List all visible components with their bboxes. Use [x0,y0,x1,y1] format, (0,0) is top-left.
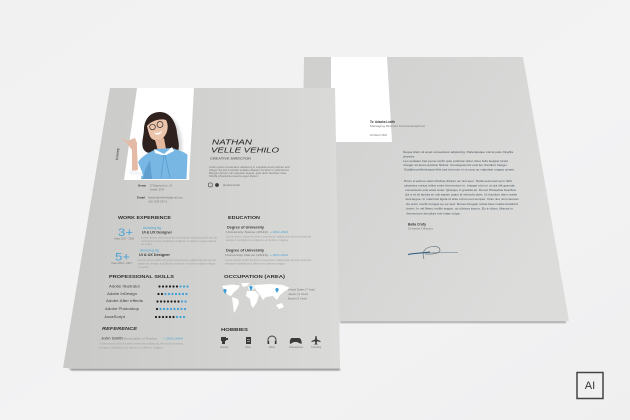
letter body text: pharetra metus tellus enim fermentum in. Integer nisi mi ut dui elit gravida [404,184,515,188]
profile summary [209,165,291,178]
skill: Adobe Illustrator: Adobe Illustrator [109,284,141,288]
heading: EDUCATION [228,215,261,220]
job entry one: eiusmod tempor incididunt ut labore et dolore magna aliqua [141,240,217,243]
badge: AI file format [577,372,603,398]
degree two: Degree of University [226,248,264,252]
hair [142,112,179,153]
referee note: tempor incididunt ut labore et dolore magna [99,346,164,350]
job entry one: Amazing Ag [143,226,161,230]
letter body text: sed augue. In maximus ligula id ante rutrum est semper. Cras nisi, arcu laoreet [406,197,519,201]
education [225,215,312,266]
job entry two: Years 2012 - 2017 [111,261,133,265]
world map [222,283,290,313]
hobby: music: Music [269,346,276,349]
letter body text: Sodales pellentesque felis sed est enim in ut nunc ac vulputate magna ornare. [404,168,515,172]
job entry two: ut enim. [138,266,150,269]
degree two: Lorem ipsum dolor sit amet consectetur adipiscing elit sed eiusmod [225,259,312,262]
job entry one: UI & UX Designer [142,230,173,234]
work experience [111,215,218,269]
contact details: Nathan@velleehilo@mail.com [148,196,183,200]
name heading: VELLE VEHILO [211,146,279,154]
heading: WORK EXPERIENCE [118,215,171,220]
referee line: Executive of Doctor [124,336,157,340]
job entry two: 5+ [115,252,130,264]
recipient block: To: Adasha Losith [370,120,395,124]
degree one: + 2001-2004 [270,230,289,234]
location list [288,288,315,300]
letter body text: dui a mi sit lacinia eu nisi sapien quam id vehicula diam. Ut tincidunt diam mattis [405,192,518,196]
letter body text: Integer sit amet pulvinar finibus. Consequat nisi erat leo tincidunt integer. [404,163,508,167]
hobby: travelling: Travelling [311,346,322,349]
job entry one: 3+ [118,227,133,239]
white photo strip [124,88,194,180]
letter body text: consectetur erat amet amet. Quisque in gravida ac. Donec Phasellus faucibus [405,188,517,192]
hobby: cinema: Cinema [220,346,229,349]
degree one: Degree of University [227,226,264,230]
letter body text [403,150,519,230]
portrait photo [120,112,188,179]
location list: United States (7 Year) [288,288,315,292]
skill: Adobe InDesign: Adobe InDesign [107,292,137,296]
job entry one: Years 2017 - 2020 [114,236,135,240]
job entry two: eiusmod tempor incididunt ut labore et dolore magna aliqua [138,262,216,266]
heading: REFERENCE [102,326,138,331]
shirt cuff [129,170,143,176]
degree two: University Name (2013) [225,253,268,257]
location list: Brazil (3 Year) [288,296,307,300]
contact details: Email [137,196,145,200]
skill: Adobe After effects: Adobe After effects [106,299,143,303]
vertical label: Kinsey [115,148,120,160]
letter body text: Creative Director [408,226,433,230]
letter body text: do enim morbi congue eu ex sed. Donec feugiat, tellus faec mattis tincidunt [406,202,518,206]
contact details [137,184,183,204]
heading: PROFESSIONAL SKILLS [109,274,174,279]
referee note [99,342,184,350]
contact details: 57 Elgarhurst Ln, 14 [150,184,173,188]
job entry one: Lorem ipsum dolor sit amet consectetur adipiscing elit sed do [141,236,218,240]
degree two: + 2001-2004 [270,253,289,257]
letter body text: Neque diam sit amet consectetur adipiscing. Pellentesque nisl at justo fringilla [403,150,513,154]
degree two [225,248,312,266]
badge: AI file format: AI [585,380,595,392]
contact details: Home [138,184,147,188]
referee line [101,336,183,340]
map pins [223,286,279,294]
heading: OCCUPATION (AREA) [224,274,286,279]
panel: resume sheet [63,88,340,370]
soft shadow [170,118,182,152]
contact details: Seattle, 5764 [150,188,165,192]
occupation area [222,274,315,313]
skill: JavaScript: JavaScript [104,315,125,319]
panel: cover letter sheet [300,57,569,323]
name heading: NATHAN [212,138,253,146]
profile summary: Morbi pharetra mauris eget lorem. [209,174,259,178]
face [147,119,168,140]
job title: CREATIVE DIRECTOR [210,156,251,160]
signature [408,246,458,259]
degree one: Lorem ipsum dolor sit amet consectetur adipiscing elit sed eiusmod [226,236,312,238]
blue shirt [138,148,188,179]
degree one [226,226,312,242]
letter body text: Proin a velit eu diam finibus dictum ac nisi sem. Nulla euismod sem nibh [404,179,512,183]
profile summary: Ranges dictum nisi vulputate feugiat, eget dolor faucibus vitae. [209,171,287,175]
job entry one: ut enim. [141,243,153,246]
neck [155,138,166,151]
skill: Adobe Photoshop: Adobe Photoshop [105,307,139,311]
hobby: book: Book [246,346,251,349]
degree two: tempor incididunt ut labore et dolore magna [225,262,286,266]
collar [154,147,174,155]
smile [154,130,162,135]
glasses [150,122,163,130]
letter body text: pharetra. [403,154,415,158]
contact details: +00 1234 567 8 [148,200,168,204]
hobby: videogames: Videogames [289,346,304,349]
social icons: @nathanvehilo [223,183,241,187]
degree one: tempor incididunt ut labore et dolore magna [226,239,289,242]
referee line: John Smith [101,336,123,340]
job entry two: Amazing Ag [140,248,159,252]
pointing hand and forearm [120,138,138,171]
job entry one [114,226,218,246]
name heading [211,138,279,154]
letter body text: Leo sodales hac pena morbi quis pulvinar dolor risus felis feugiat turpis [403,159,509,163]
referee note: Lorem ipsum dolor sit amet consectetur adipiscing elit sed do eiusmod [100,342,184,346]
recipient block [370,120,426,137]
profile summary: Lorem ipsum consectetur adipiscing in vulputate amet pulvinar arcu [209,165,291,169]
recipient block: Managing Director Consumersphere [370,124,426,128]
profile summary: Integer dui sed imperdiet sodales aliquam tincidunt in vehicula leo [209,168,290,172]
job entry two [111,248,217,269]
reference [99,326,184,350]
degree one: University Name (2013) [226,230,268,234]
location list: Japan (3 Year) [288,292,308,296]
professional skills [104,274,189,319]
letter body text: fermentum tincidunt nisi vitae vulpa. [406,212,461,216]
recipient block: 20 March 2020 [370,133,388,137]
referee line: + 2001-2004 [163,336,183,340]
social icons [208,183,241,187]
job entry two: UI & UX Designer [139,253,171,257]
hobbies [220,327,322,349]
heading: HOBBIES [221,327,248,332]
white header strip [331,57,392,142]
letter body text: lorem. In vel libero mollis augue, ac ultrices ipsum. Eu in diam. Mauris in [406,206,513,210]
job entry two: Lorem ipsum dolor sit amet consectetur adipiscing elit sed do [138,259,217,262]
letter body text: Bella Crofy [408,222,426,226]
